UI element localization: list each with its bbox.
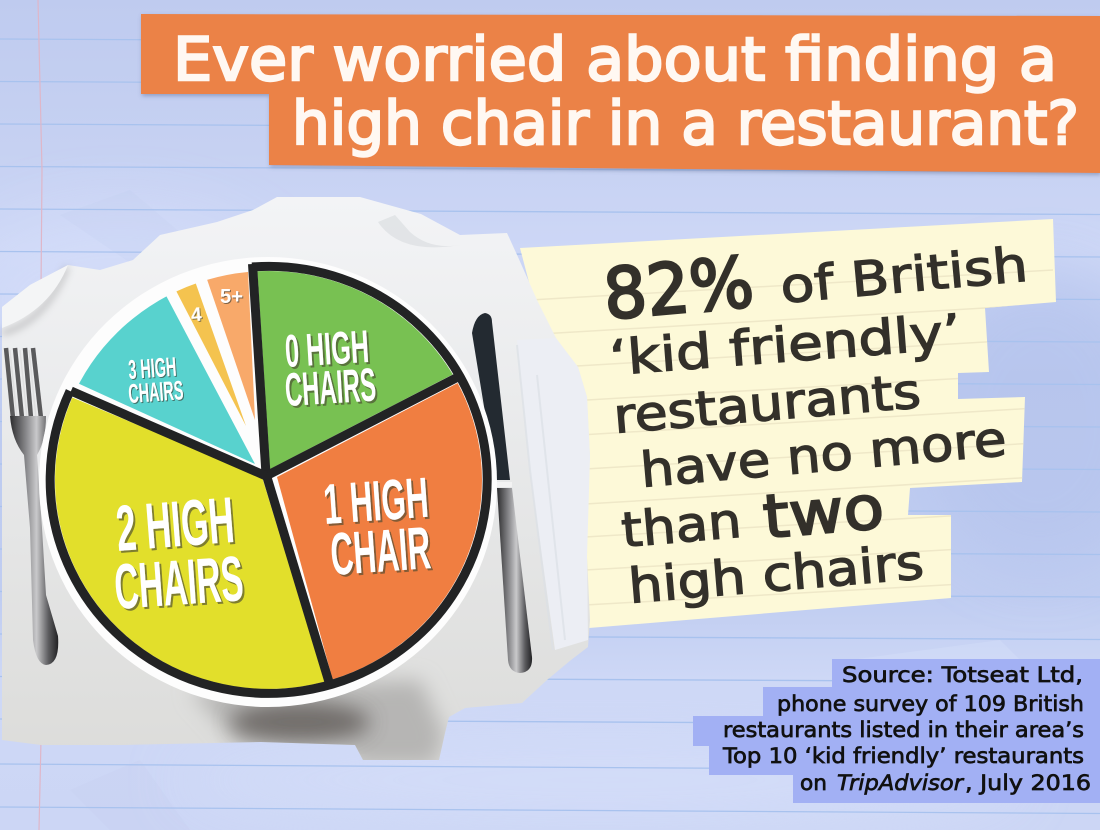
label: 0 high chairs: CHAIRS — [283, 358, 377, 416]
torn photo: place setting with pie chart plate — [2, 197, 590, 765]
note line: of British: of British — [778, 237, 1030, 315]
label: 2 high chairs — [112, 483, 246, 623]
note line: than: than — [619, 493, 744, 559]
pie slice: 3 high chairs — [79, 296, 255, 464]
label: 4: 4 — [190, 305, 203, 326]
label: 0 high chairs: 0 HIGH — [283, 320, 370, 377]
note line: high chairs: high chairs — [626, 534, 926, 615]
label: 3 high chairs: CHAIRS — [127, 375, 184, 409]
note paper — [520, 219, 1056, 628]
label: 3 high chairs: 3 HIGH — [127, 352, 177, 385]
label: 0 high chairs — [283, 320, 377, 416]
source line 4: Top 10 ‘kid friendly’ restaurants — [722, 744, 1084, 768]
side plate edge — [2, 265, 68, 333]
stat: 82%: 82% — [600, 241, 757, 336]
note line: kid friendly: ‘kid friendly’ — [608, 304, 963, 387]
source line 5: on — [800, 771, 827, 795]
plate shadow — [190, 680, 445, 765]
pie outline and dividers — [50, 264, 487, 693]
title banner shapes — [141, 14, 1100, 173]
source highlight bars — [693, 659, 1100, 803]
pie slice: 2 high chairs — [55, 398, 324, 689]
napkin — [517, 338, 590, 650]
pie slice: 5+ high chairs — [207, 272, 255, 420]
note line: have no more: have no more — [638, 411, 1009, 499]
title banner — [141, 14, 1100, 173]
glass reflection — [378, 215, 460, 247]
label: 1 high chair — [321, 466, 433, 588]
source line 1: Source: Totseat Ltd, — [842, 663, 1083, 687]
source line 5: TripAdvisor — [837, 771, 964, 795]
label: 2 high chairs: CHAIRS — [112, 542, 246, 623]
title line 1: Ever worried about finding a — [173, 25, 1057, 95]
pie slice: 1 high chair — [277, 383, 482, 680]
icon: knife — [472, 313, 532, 673]
plate rim — [39, 257, 497, 707]
label: 5+: 5+ — [220, 286, 243, 308]
pie chart — [40, 250, 500, 710]
source line 5: , July 2016 — [965, 771, 1091, 795]
title line 2: high chair in a restaurant? — [292, 89, 1079, 159]
label: 2 high chairs: 2 HIGH — [113, 483, 237, 565]
emphasis: two: two — [760, 473, 887, 553]
source note — [693, 659, 1100, 803]
pie slice: 4 high chairs — [176, 284, 246, 426]
sticky note panel — [520, 219, 1056, 628]
source line 2: phone survey of 109 British — [777, 692, 1084, 716]
source line 3: restaurants listed in their area’s — [723, 718, 1084, 742]
pie slice: 0 high chairs — [258, 271, 453, 469]
label: 3 high chairs — [127, 352, 184, 409]
label: 1 high chair: CHAIR — [328, 514, 433, 588]
note line: restaurants: restaurants — [611, 363, 923, 445]
source line 5 — [800, 771, 1091, 795]
label: 1 high chair: 1 HIGH — [321, 466, 431, 537]
torn paper tablecloth — [2, 197, 590, 760]
icon: fork — [6, 348, 58, 665]
